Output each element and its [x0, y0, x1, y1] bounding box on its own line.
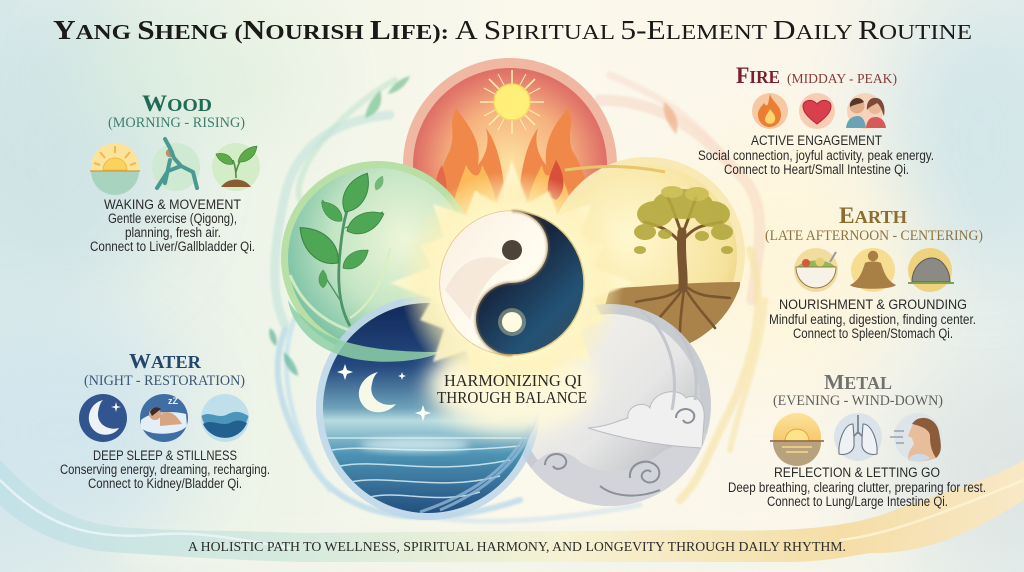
- clouds and swirls: [532, 324, 707, 506]
- icon: two people: [846, 93, 886, 129]
- icon: sleeping person: [140, 394, 188, 442]
- center caption: [437, 371, 587, 407]
- center caption: HARMONIZING QI: [444, 371, 582, 390]
- icon: sleeping person: zZ: [168, 396, 178, 406]
- earth description: [769, 297, 976, 341]
- earth description: Mindful eating, digestion, finding center.: [769, 312, 976, 327]
- fire description: ACTIVE ENGAGEMENT: [751, 133, 882, 148]
- icon: lungs: [834, 413, 882, 461]
- tree: [634, 186, 733, 332]
- icon: yoga figure: [152, 139, 200, 191]
- wood description: WAKING & MOVEMENT: [104, 197, 241, 212]
- wood time: (MORNING - RISING): [108, 115, 245, 131]
- panel: metal: [728, 370, 986, 509]
- decorative energy ribbons around the mandala: [269, 75, 765, 521]
- panel: earth: [765, 203, 983, 341]
- center caption: THROUGH BALANCE: [437, 388, 587, 407]
- earth heading: EARTH: [839, 203, 907, 228]
- icon: sprout: [212, 143, 260, 191]
- metal description: Connect to Lung/Large Intestine Qi.: [767, 494, 948, 509]
- fire time: (MIDDAY - PEAK): [787, 71, 897, 86]
- earth description: Connect to Spleen/Stomach Qi.: [793, 326, 953, 341]
- metal description: REFLECTION & LETTING GO: [774, 465, 940, 480]
- stars: [337, 364, 431, 421]
- wood heading: WOOD: [142, 91, 212, 116]
- icon: meditating figure: [850, 248, 896, 292]
- yin yang symbol: [440, 211, 584, 355]
- central radiant glow: [390, 161, 634, 433]
- metal description: Deep breathing, clearing clutter, preparing for rest.: [728, 480, 986, 495]
- fire description: Connect to Heart/Small Intestine Qi.: [724, 162, 909, 177]
- water heading: WATER: [129, 349, 202, 373]
- icon: crescent moon: [79, 394, 127, 442]
- icon: stone: [908, 248, 954, 292]
- earth circle: [558, 157, 745, 344]
- title: [53, 15, 972, 45]
- panel: fire: [698, 63, 934, 177]
- wood description: planning, fresh air.: [125, 225, 221, 240]
- earth time: (LATE AFTERNOON - CENTERING): [765, 228, 983, 244]
- metal circle: [526, 304, 711, 506]
- metal description: [728, 465, 986, 509]
- metal heading: METAL: [824, 370, 892, 394]
- fire heading: FIRE: [736, 63, 780, 88]
- title: A S PIRITUAL 5-E LEMENT DAILY ROUTINE: [455, 15, 972, 45]
- water circle: [316, 296, 540, 520]
- water description: Conserving energy, dreaming, recharging.: [60, 462, 270, 477]
- water description: [60, 448, 270, 491]
- wood circle: [281, 161, 464, 345]
- icon: breathing woman: [890, 413, 942, 461]
- wood description: Connect to Liver/Gallbladder Qi.: [90, 239, 255, 254]
- fire circle: [403, 58, 617, 216]
- sea: [325, 438, 530, 498]
- wood description: [90, 197, 255, 254]
- bottom tagline: A HOLISTIC PATH TO WELLNESS, SPIRITUAL HARMONY, AND LONGEVITY THROUGH DAILY RHYTHM.: [188, 539, 846, 554]
- plant with leaves: [292, 168, 390, 326]
- icon: ocean waves: [201, 394, 249, 442]
- bottom ribbon: [0, 460, 1024, 562]
- sun: [480, 70, 544, 134]
- icon: sunrise: [90, 143, 140, 195]
- flames: [436, 108, 585, 214]
- title: YANG SHENG ( NOURISH LIFE):: [53, 15, 449, 45]
- fire description: [698, 133, 934, 177]
- wood description: Gentle exercise (Qigong),: [108, 211, 237, 226]
- moon: [359, 372, 396, 412]
- earth description: NOURISHMENT & GROUNDING: [779, 297, 967, 312]
- icon: nourishing bowl: [794, 248, 838, 292]
- ground: [606, 282, 740, 344]
- icon: heart: [799, 93, 835, 129]
- water description: DEEP SLEEP & STILLNESS: [93, 448, 237, 463]
- icon: flame: [752, 93, 788, 129]
- wood ribbon over water: [288, 300, 440, 362]
- metal time: (EVENING - WIND-DOWN): [773, 393, 943, 409]
- water description: Connect to Kidney/Bladder Qi.: [88, 476, 242, 491]
- fire description: Social connection, joyful activity, peak energy.: [698, 148, 934, 163]
- panel: wood: [90, 91, 260, 254]
- icon: sunset: [770, 413, 824, 466]
- panel: water: [60, 349, 270, 491]
- water time: (NIGHT - RESTORATION): [84, 373, 245, 389]
